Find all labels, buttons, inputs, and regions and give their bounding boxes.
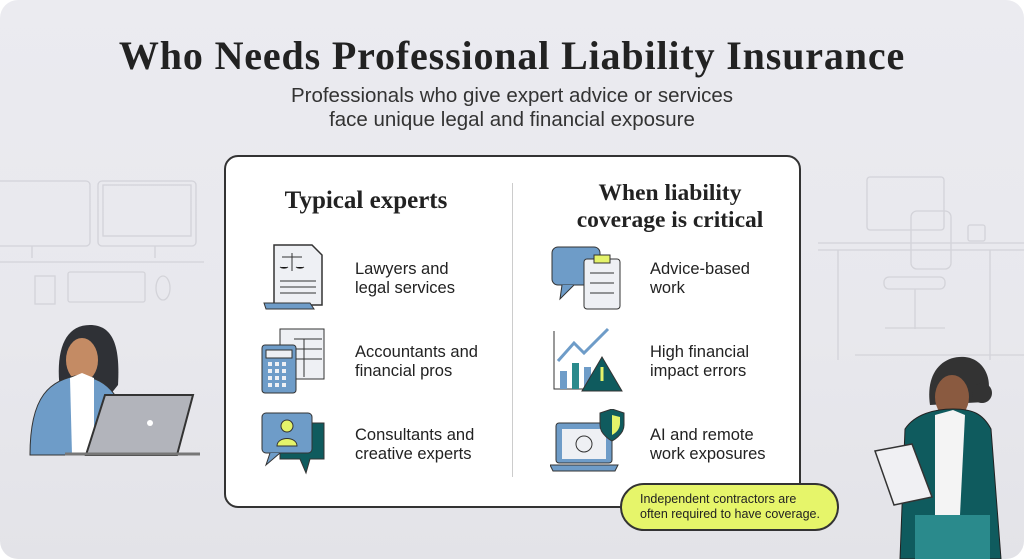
text: lawyers: Lawyers and [355,260,449,278]
text: lawyers: legal services [355,279,455,297]
right column heading: coverage is critical [577,207,763,233]
text: consultants: Consultants and [355,426,474,444]
text: advice [650,260,750,297]
subtitle: Professionals who give expert advice or services [291,84,733,107]
right column heading: When liability [598,180,742,206]
icon: chart with warning [554,328,623,392]
icon: legal document [263,244,323,310]
icon: laptop with shield [550,409,624,472]
text: accountants [355,343,478,380]
left column heading: Typical experts [285,187,447,214]
text: financial errors: High financial [650,343,749,361]
icon: consultant chat [262,412,324,474]
woman holding paper (right) [874,356,1002,559]
callout: Independent contractors are [640,492,796,506]
text: financial errors [650,343,749,380]
text: AI remote [650,426,766,463]
divider [512,183,513,477]
text: advice: Advice-based [650,260,750,278]
text: consultants: creative experts [355,445,471,463]
text: accountants: Accountants and [355,343,478,361]
subtitle [291,84,733,131]
text: AI remote: AI and remote [650,426,754,444]
text: financial errors: impact errors [650,362,746,380]
icon: advice clipboard [552,246,620,310]
title: Who Needs Professional Liability Insurance [119,33,905,78]
callout [620,483,839,531]
woman at laptop (left) [30,325,200,456]
text: accountants: financial pros [355,362,452,380]
right column heading [577,180,763,233]
subtitle: face unique legal and financial exposure [329,108,695,131]
text: AI remote: work exposures [650,445,766,463]
callout: often required to have coverage. [640,507,820,521]
text: consultants [355,426,474,463]
text: lawyers [355,260,455,297]
icon: calculator [262,328,324,394]
text: advice: work [650,279,685,297]
main card [224,155,801,508]
